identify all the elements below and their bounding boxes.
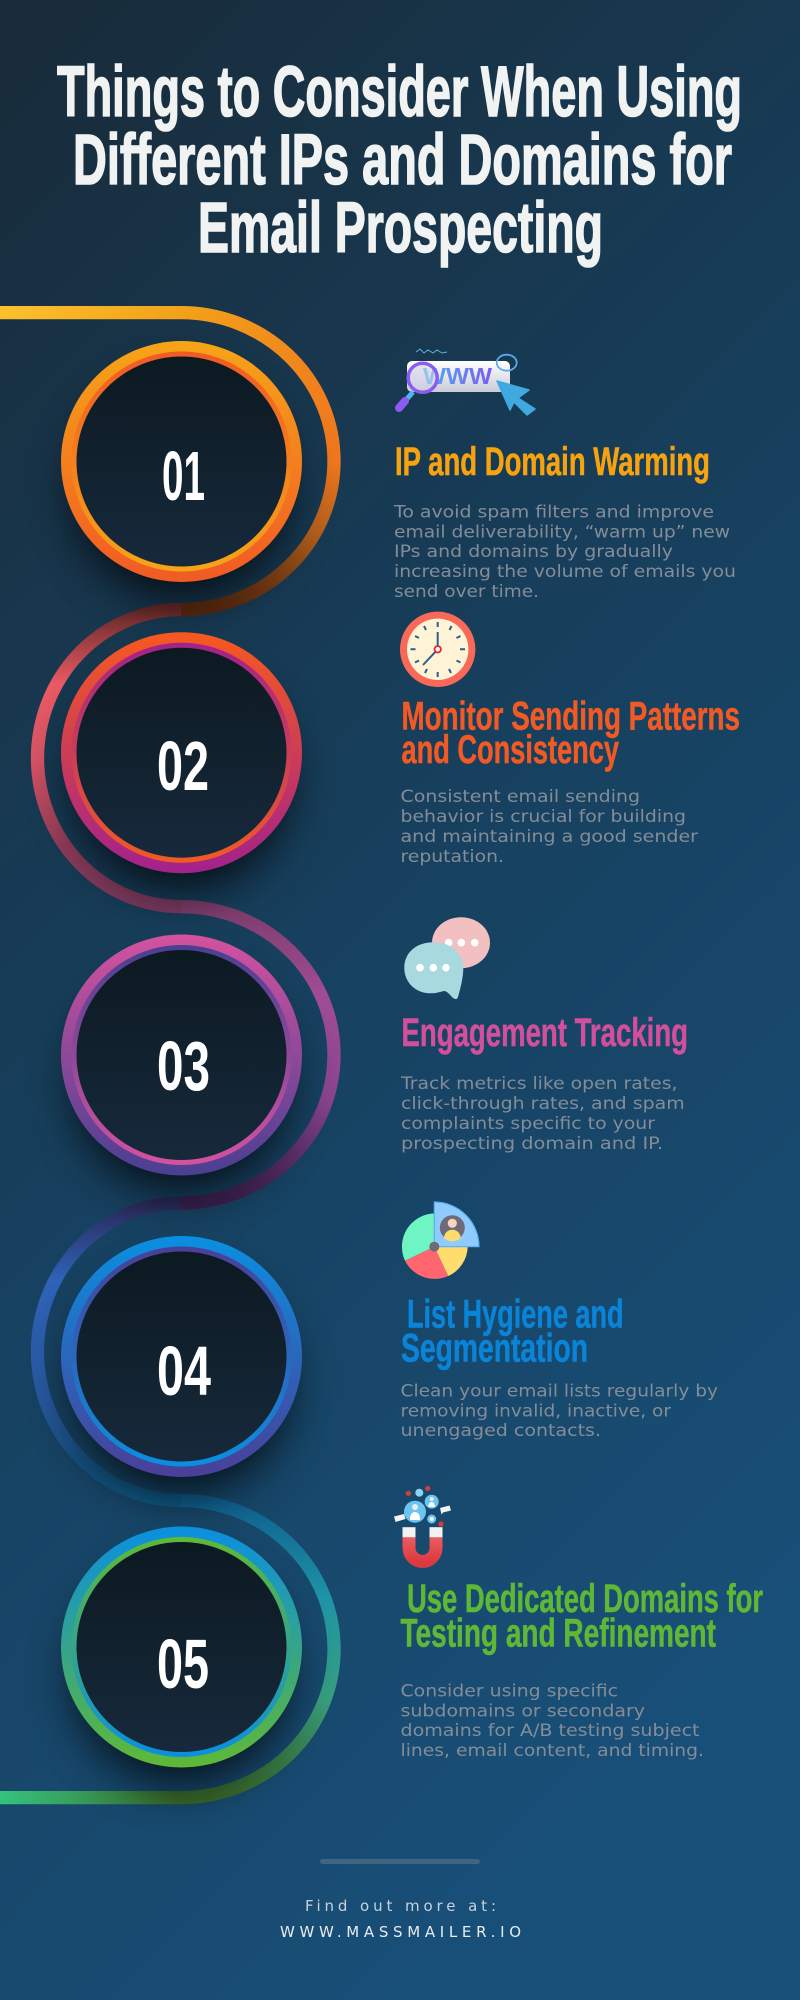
body: step 5 <box>400 1681 704 1761</box>
heading: step 2: and Consistency <box>402 728 620 772</box>
step circle 05: 05 <box>157 1625 209 1703</box>
body: step 2: and maintaining a good sender <box>400 827 698 847</box>
icon: www search: WWW <box>423 363 492 389</box>
icon: magnet attracting people <box>394 1486 451 1561</box>
body: step 2: behavior is crucial for building <box>400 807 686 827</box>
step circle 04 <box>61 1236 302 1477</box>
step circle 01: 01 <box>162 437 205 515</box>
body: step 5: lines, email content, and timing. <box>400 1741 704 1761</box>
heading: step 5 <box>400 1577 763 1655</box>
body: step 4 <box>400 1381 718 1441</box>
footer divider <box>320 1859 480 1864</box>
body: step 1: IPs and domains by gradually <box>394 542 673 562</box>
body: step 1: increasing the volume of emails you <box>394 562 736 582</box>
step circle 04: 04 <box>157 1332 211 1410</box>
circle shadows <box>76 385 288 1783</box>
body: step 1 <box>393 502 736 602</box>
step circle 03 <box>61 934 302 1176</box>
body: step 1: send over time. <box>394 582 539 602</box>
body: step 5: subdomains or secondary <box>400 1701 645 1721</box>
body: step 3: prospecting domain and IP. <box>401 1134 663 1154</box>
heading: step 4 <box>401 1292 624 1371</box>
step circle 02: 02 <box>157 727 209 805</box>
icon: chat bubbles <box>404 917 490 999</box>
body: step 3 <box>400 1074 685 1154</box>
body: step 4: removing invalid, inactive, or <box>400 1401 671 1421</box>
icon: www search <box>399 349 535 415</box>
footer call to action: Find out more at: <box>305 1897 496 1915</box>
body: step 4: unengaged contacts. <box>400 1421 601 1441</box>
step circle 01 <box>61 341 302 582</box>
step circle 05 <box>61 1526 302 1768</box>
body: step 2: Consistent email sending <box>400 787 640 807</box>
body: step 1: To avoid spam filters and improve <box>393 502 714 522</box>
winding ribbon connecting the steps <box>0 313 334 1798</box>
icon: audience pie chart <box>402 1202 479 1279</box>
icon: clock <box>400 612 475 687</box>
heading: step 4: Segmentation <box>401 1327 588 1371</box>
title <box>57 53 742 268</box>
footer call to action: WWW.MASSMAILER.IO <box>280 1923 521 1941</box>
step circle 03: 03 <box>157 1027 210 1105</box>
body: step 5: domains for A/B testing subject <box>400 1721 700 1741</box>
body: step 1: email deliverability, “warm up” new <box>394 522 730 542</box>
body: step 2: reputation. <box>400 847 504 867</box>
step circle 02 <box>61 632 302 873</box>
title: Email Prospecting <box>198 189 603 268</box>
body: step 3: Track metrics like open rates, <box>400 1074 678 1094</box>
footer call to action <box>280 1897 521 1941</box>
heading: step 4: List Hygiene and <box>407 1292 624 1336</box>
body: step 5: Consider using specific <box>400 1681 618 1701</box>
body: step 3: click-through rates, and spam <box>401 1094 685 1114</box>
heading: step 2 <box>402 694 740 772</box>
body: step 2 <box>400 787 698 867</box>
body: step 4: Clean your email lists regularly by <box>400 1381 718 1401</box>
body: step 3: complaints specific to your <box>401 1114 655 1134</box>
